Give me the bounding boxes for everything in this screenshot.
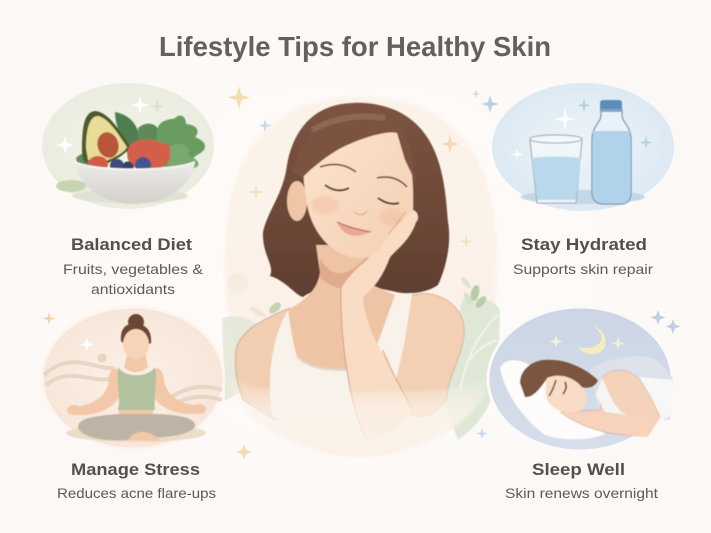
text block: stay hydrated <box>513 235 653 277</box>
circle <box>42 83 214 209</box>
tomato <box>127 140 170 171</box>
circle <box>42 307 224 449</box>
ear <box>287 181 307 221</box>
sparkles <box>80 337 94 352</box>
head <box>128 314 144 330</box>
circle <box>492 83 674 211</box>
panel: manage stress image <box>42 307 224 449</box>
text block: manage stress <box>57 460 216 501</box>
arms <box>74 368 122 415</box>
panel: sleep well image <box>488 307 673 451</box>
avocado <box>82 111 130 166</box>
arm <box>560 412 660 437</box>
sleeping figure <box>500 356 673 439</box>
blueberries <box>110 159 124 173</box>
fringe <box>292 106 416 183</box>
meditating figure <box>66 314 206 442</box>
text block: stay hydrated: Supports skin repair <box>513 261 653 277</box>
torso <box>118 408 154 420</box>
tank <box>118 367 156 410</box>
face <box>304 132 413 258</box>
right shoulder and upper arm <box>385 294 464 417</box>
text block: sleep well: Skin renews overnight <box>505 485 658 501</box>
waves <box>44 362 222 406</box>
sparkles <box>554 108 576 130</box>
text block: balanced diet <box>63 235 204 297</box>
circle <box>488 307 672 451</box>
pillow <box>500 360 605 439</box>
bowl <box>75 162 195 204</box>
text block: balanced diet: Fruits, vegetables & <box>63 261 204 277</box>
back hair <box>263 103 449 297</box>
sparkles <box>131 96 149 114</box>
salad bowl <box>56 111 205 204</box>
text block: stay hydrated: Stay Hydrated <box>521 235 647 254</box>
crescent moon <box>578 326 606 354</box>
mouth <box>337 223 370 236</box>
neck and chest <box>288 245 395 370</box>
background blob <box>225 97 497 456</box>
water bottle <box>592 110 631 204</box>
decorative sparkles <box>42 86 680 460</box>
tank top <box>270 293 412 442</box>
cheeks <box>311 196 339 214</box>
closed eyes <box>325 185 349 190</box>
title: Lifestyle Tips for Healthy Skin <box>159 31 551 62</box>
small tomato <box>88 156 108 172</box>
water glass <box>530 140 582 203</box>
forearm and hand <box>341 210 418 442</box>
left shoulder <box>235 308 300 420</box>
foliage <box>222 273 500 440</box>
panel: central portrait <box>222 97 500 456</box>
face <box>546 376 587 412</box>
text block: sleep well <box>505 460 658 501</box>
text block: balanced diet: Balanced Diet <box>71 235 192 254</box>
text block: manage stress: Reduces acne flare-ups <box>57 485 216 501</box>
text block: sleep well: Sleep Well <box>532 460 625 479</box>
body <box>560 370 660 436</box>
blanket <box>590 356 673 420</box>
bottom fade <box>225 375 490 456</box>
legs <box>78 414 195 440</box>
eyebrows <box>320 164 356 172</box>
greens <box>115 112 140 160</box>
nose <box>354 211 367 215</box>
figure <box>235 103 464 442</box>
text block: balanced diet: antioxidants <box>91 281 175 297</box>
panel: stay hydrated image <box>492 83 674 211</box>
panel: balanced diet image <box>42 83 214 209</box>
text block: manage stress: Manage Stress <box>71 460 200 479</box>
hair <box>520 360 598 397</box>
sheet <box>640 377 673 425</box>
stars <box>550 335 562 348</box>
